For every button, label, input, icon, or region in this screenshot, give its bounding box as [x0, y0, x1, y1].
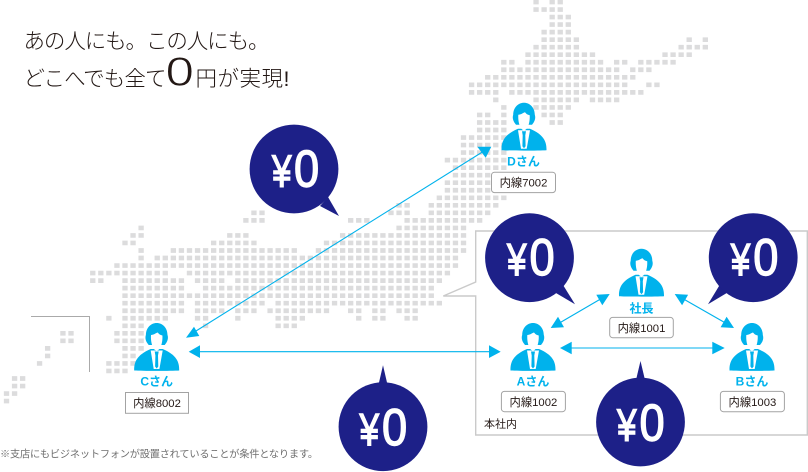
footnote: ※支店にもビジネットフォンが設置されていることが条件となります。 — [0, 448, 318, 460]
title: どこへでも全て — [24, 67, 166, 91]
arrow: C to D — [186, 147, 491, 338]
bubble: yen zero, head office right: 0 — [753, 229, 778, 287]
title: 0 — [166, 48, 194, 94]
bubble: yen zero, head office right — [708, 213, 798, 304]
bubble: yen zero, head office left: 0 — [530, 229, 555, 287]
extension box: C: 内線8002 — [133, 396, 181, 410]
head office label: 本社内 — [484, 417, 517, 431]
panel: head office — [443, 231, 807, 435]
bubble: yen zero, head office left — [485, 213, 575, 304]
extension box: A: 内線1002 — [510, 395, 557, 409]
bubble: yen zero, top left: 0 — [294, 140, 319, 198]
dot map of Japan — [4, 2, 711, 401]
title — [24, 30, 290, 94]
bubble: yen zero, top left: ¥ — [271, 145, 292, 197]
bubble: yen zero, bottom centre — [339, 365, 427, 471]
label: D: Dさん — [507, 155, 540, 169]
extension box: D — [492, 172, 556, 193]
person: president — [619, 249, 664, 297]
arrow: A to B — [560, 342, 725, 354]
arrow: A to president — [551, 294, 610, 328]
arrow: C to A — [189, 345, 501, 358]
title: あの人にも。この人にも。 — [24, 30, 270, 54]
title: 円が実現! — [196, 67, 290, 91]
extension box: A — [501, 391, 565, 412]
label: B: Bさん — [736, 374, 768, 388]
person: D — [501, 103, 547, 151]
label: president: 社長 — [629, 301, 654, 316]
person: C — [134, 323, 179, 371]
bubble: yen zero, top left — [250, 125, 339, 216]
person: A — [510, 323, 556, 371]
bubble: yen zero, bottom centre: ¥ — [359, 404, 380, 455]
extension box: B — [720, 391, 784, 412]
bubble: yen zero, head office bottom: 0 — [640, 394, 665, 452]
inset frame for Okinawa — [31, 316, 90, 372]
bubble: yen zero, bottom centre: 0 — [382, 399, 407, 457]
person: B — [729, 323, 775, 371]
bubble: yen zero, head office right: ¥ — [730, 234, 751, 285]
bubble: yen zero, head office left: ¥ — [506, 234, 527, 285]
extension box: president — [610, 317, 673, 338]
extension box: B: 内線1003 — [729, 395, 776, 409]
bubble: yen zero, head office bottom: ¥ — [616, 399, 637, 451]
extension box: D: 内線7002 — [500, 176, 547, 190]
bubble: yen zero, head office bottom — [596, 361, 685, 466]
arrow: president to B — [675, 294, 734, 328]
label: C: Cさん — [140, 375, 173, 389]
extension box: C — [126, 392, 188, 413]
label: A: Aさん — [517, 374, 549, 388]
extension box: president: 内線1001 — [618, 321, 665, 335]
